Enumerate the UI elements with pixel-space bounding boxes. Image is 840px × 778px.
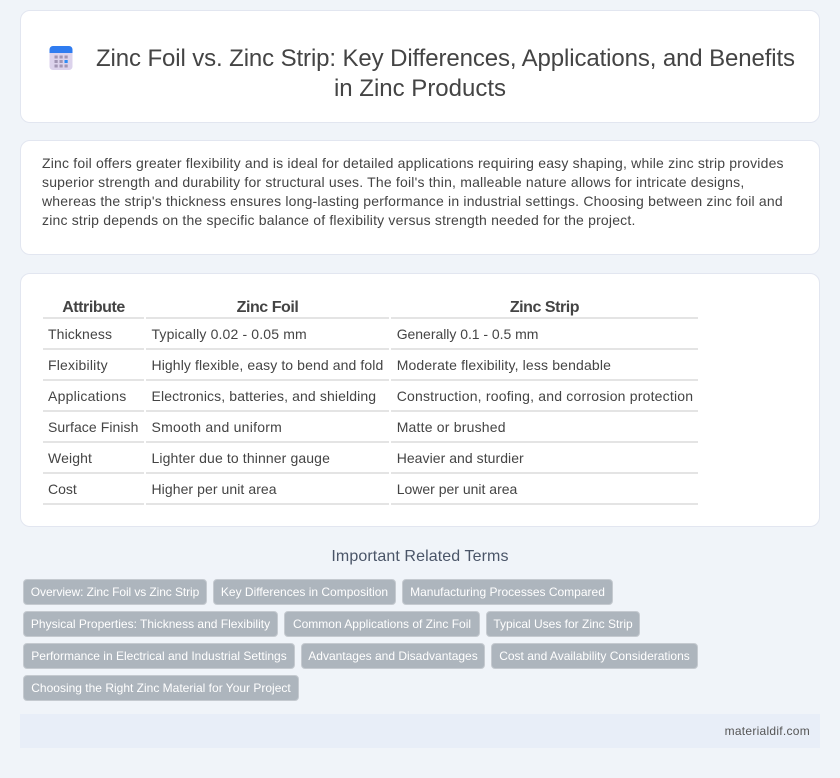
- comparison table: Flexibility: [48, 357, 108, 373]
- comparison table: Zinc Foil: [237, 299, 298, 316]
- related terms tags: Choosing the Right Zinc Material for Your Project: [31, 681, 291, 695]
- related terms tags: Overview: Zinc Foil vs Zinc Strip: [31, 585, 199, 599]
- comparison table: Higher per unit area: [152, 481, 277, 497]
- comparison table: Moderate flexibility, less bendable: [397, 357, 611, 373]
- comparison table: Heavier and sturdier: [397, 450, 524, 466]
- related terms heading: Important Related Terms: [331, 548, 509, 565]
- related terms tags: Typical Uses for Zinc Strip: [493, 617, 633, 631]
- comparison table: Lighter due to thinner gauge: [152, 450, 330, 466]
- comparison table: Surface Finish: [48, 419, 138, 435]
- comparison table: Thickness: [48, 326, 112, 342]
- comparison table: Matte or brushed: [397, 419, 506, 435]
- related terms tags: Cost and Availability Considerations: [499, 649, 690, 663]
- intro text: [42, 155, 784, 228]
- title: in Zinc Products: [334, 75, 506, 102]
- comparison table: Weight: [48, 450, 92, 466]
- related terms tags: Performance in Electrical and Industrial Settings: [31, 649, 287, 663]
- comparison table: Typically 0.02 - 0.05 mm: [152, 326, 307, 342]
- intro card: [20, 140, 820, 255]
- comparison table: Attribute: [62, 299, 125, 316]
- footer bar: [20, 714, 820, 748]
- intro text: Zinc foil offers greater flexibility and is ideal for detailed applications requiring easy shaping, while zinc strip provides: [42, 155, 784, 171]
- intro text: superior strength and durability for structural uses. The foil's thin, malleable nature allows for intricate designs,: [42, 174, 744, 190]
- comparison table: Lower per unit area: [397, 481, 517, 497]
- comparison table: Smooth and uniform: [152, 419, 282, 435]
- intro text: whereas the strip's thickness ensures long-lasting performance in industrial settings. Choosing between zinc foil and: [42, 193, 783, 209]
- comparison table: Cost: [48, 481, 77, 497]
- related terms tags: Common Applications of Zinc Foil: [293, 617, 471, 631]
- comparison table: Highly flexible, easy to bend and fold: [152, 357, 383, 373]
- related terms tags: Advantages and Disadvantages: [308, 649, 478, 663]
- header card: [20, 10, 820, 123]
- title: Zinc Foil vs. Zinc Strip: Key Differences, Applications, and Benefits: [96, 45, 795, 72]
- comparison table: [43, 299, 698, 505]
- comparison table: Generally 0.1 - 0.5 mm: [397, 326, 538, 342]
- related terms tags: [23, 579, 698, 701]
- related terms tags: Key Differences in Composition: [221, 585, 388, 599]
- comparison table: Electronics, batteries, and shielding: [152, 388, 376, 404]
- related terms tags: Physical Properties: Thickness and Flexibility: [31, 617, 270, 631]
- footer source: materialdif.com: [725, 724, 810, 738]
- comparison table: Construction, roofing, and corrosion protection: [397, 388, 693, 404]
- icon: calendar: [50, 46, 72, 70]
- related terms tags: Manufacturing Processes Compared: [410, 585, 605, 599]
- title: [96, 45, 795, 102]
- comparison table: Zinc Strip: [510, 299, 579, 316]
- comparison table: Applications: [48, 388, 126, 404]
- table card: [20, 273, 820, 527]
- intro text: zinc strip depends on the specific balance of flexibility versus strength needed for the project.: [42, 212, 636, 228]
